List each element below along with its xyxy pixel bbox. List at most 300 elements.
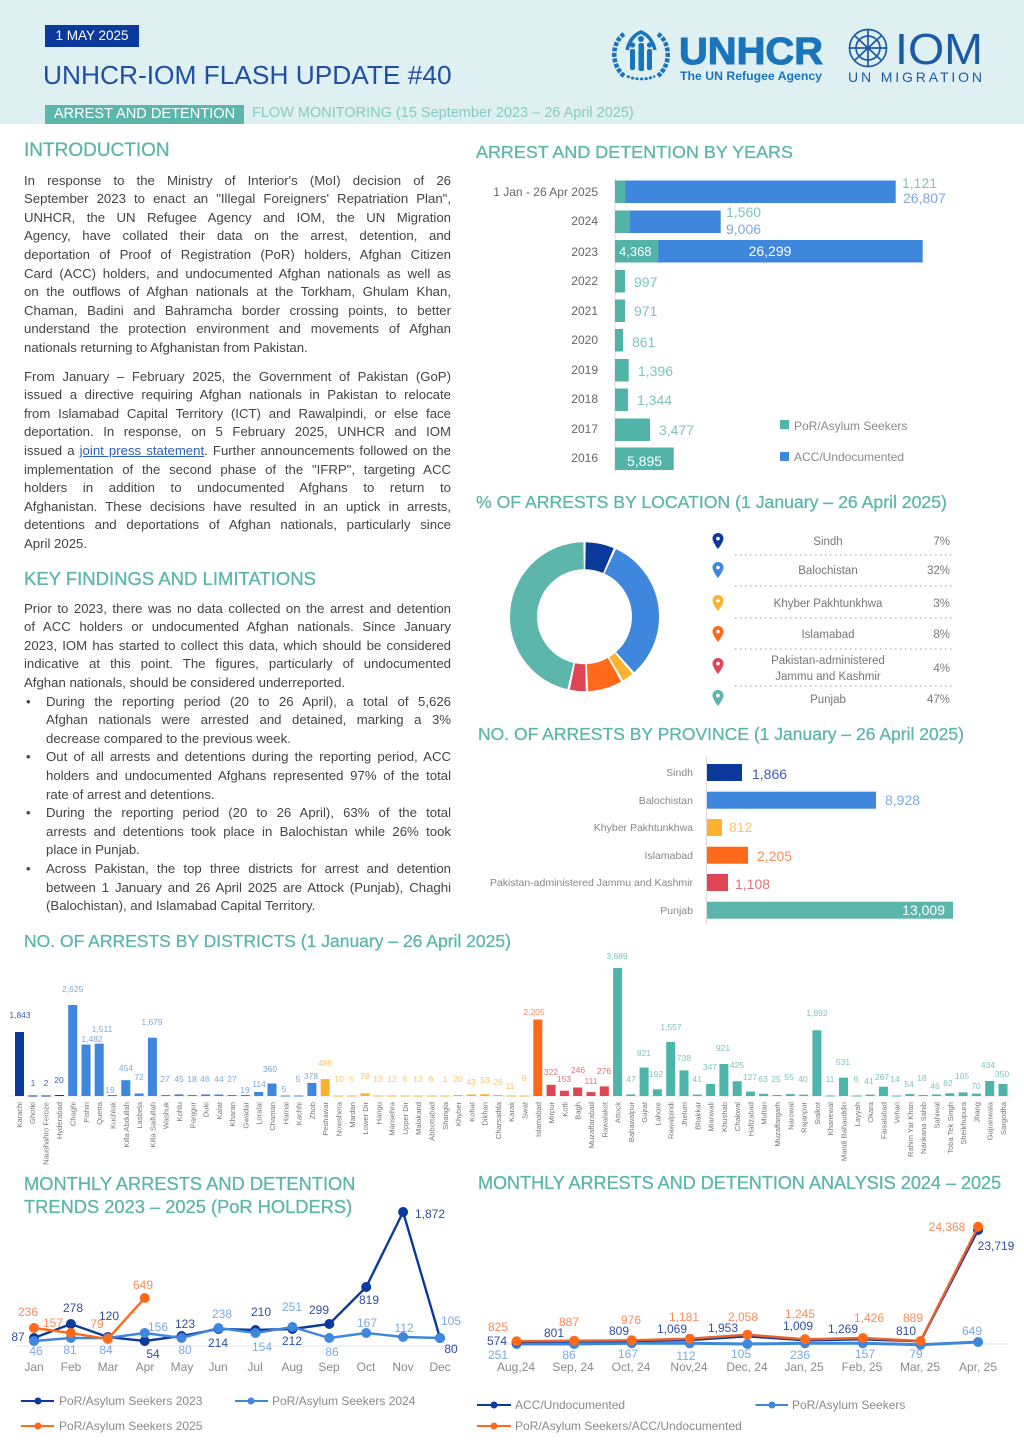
subtitle: FLOW MONITORING (15 September 2023 – 26 April 2025) [252, 105, 634, 121]
text: key findings and limitations: Afghan nationals were arrested and detained, marking a 3% [46, 712, 451, 727]
bar chart: arrests by districts [8, 951, 1012, 1165]
districts: Balochistan: Chaghi [68, 1102, 78, 1126]
bar chart: arrests by years: 2019 [571, 363, 598, 377]
text: key findings and limitations: Out of all arrests and detentions during the reporting period, ACC [46, 749, 451, 764]
bar chart: arrests by years: 997 [634, 274, 658, 290]
series: 2023: 210 [251, 1305, 271, 1319]
text: key findings and limitations: holders and undocumented Afghans represented 97% of the total [46, 768, 451, 783]
series: 2024: 86 [325, 1345, 339, 1359]
text: introduction paragraph 1: Card (ACC) holders, and undocumented Afghan nationals as well as [24, 266, 451, 281]
month axis labels: Jan, 25 [784, 1360, 824, 1374]
bar chart: arrests by province: 1,866 [752, 766, 787, 782]
location names and percentages: Islamabad [801, 629, 855, 641]
text: introduction paragraph 1: Agency, have collated their data on the arrest, detention, and [24, 228, 451, 243]
bar chart: arrests by years: 1,560 [726, 204, 761, 220]
districts: Punjab: Rajanpur [800, 1102, 809, 1133]
districts: Khyber Pakhtunkhwa: 43 [466, 1077, 476, 1087]
districts: Punjab: 47 [626, 1074, 636, 1084]
series: ACC/Undocumented: 810 [896, 1324, 916, 1338]
series: 2023: 123 [175, 1317, 195, 1331]
bar chart: arrests by years: 2023 [571, 245, 598, 259]
text: key findings and limitations: decrease compared to the previous week. [46, 731, 291, 746]
series: PoR/Asylum Seekers/ACC/Undocumented: 976 [621, 1313, 641, 1327]
month axis labels: Dec [429, 1360, 451, 1374]
bar chart: arrests by province: 812 [729, 819, 753, 835]
bar chart: arrests by years: 2016 [571, 451, 598, 465]
series: PoR/Asylum Seekers: 251 [488, 1348, 508, 1362]
districts: Balochistan: Panjgur [188, 1102, 197, 1128]
bar chart: arrests by years: 9,006 [726, 221, 761, 237]
logo: IOM: UN MIGRATION [848, 69, 982, 85]
districts: Khyber Pakhtunkhwa: 26 [493, 1077, 503, 1087]
districts: Khyber Pakhtunkhwa: Karak [507, 1102, 516, 1122]
districts: Punjab: 347 [703, 1062, 717, 1072]
month axis labels: Nov [392, 1360, 414, 1374]
districts: Balochistan: Killa Abdullah [122, 1102, 131, 1148]
districts: Balochistan: Killa Saifullah [148, 1102, 157, 1148]
districts: Punjab: 25 [771, 1074, 781, 1084]
series: ACC/Undocumented [487, 1225, 1015, 1348]
districts: Balochistan: 46 [200, 1074, 210, 1084]
districts: Khyber Pakhtunkhwa: Shangla [441, 1101, 450, 1130]
districts: Khyber Pakhtunkhwa: Kohat [467, 1101, 476, 1122]
month axis labels: Dec, 24 [726, 1360, 768, 1374]
month axis labels: Mar [98, 1360, 118, 1374]
districts: Balochistan: Pishin [82, 1102, 91, 1123]
districts: Punjab: Rawalpindi [667, 1102, 676, 1139]
districts: Punjab: Nankana Sahib [919, 1102, 928, 1154]
location names and percentages: Sindh [813, 536, 843, 548]
text: introduction paragraph 1: nationals returning to Afghanistan from Pakistan. [24, 340, 308, 355]
districts: Punjab: 40 [798, 1074, 808, 1084]
districts: Punjab: Sheikhupura [959, 1101, 968, 1145]
date badge [45, 25, 139, 47]
series: PoR/Asylum Seekers [488, 1324, 983, 1363]
districts: Islamabad: 2,205 [523, 1007, 545, 1017]
legend: trends: PoR/Asylum Seekers 2023 [59, 1394, 203, 1408]
districts: Punjab: Muzaffargarh [773, 1102, 782, 1147]
districts: Punjab: Mianwali [707, 1102, 716, 1132]
districts: Balochistan: Chaman [268, 1102, 277, 1131]
districts: Balochistan: 19 [240, 1085, 250, 1095]
districts: Punjab: Khanewal [826, 1102, 835, 1135]
districts: Punjab: Gujrat [640, 1101, 649, 1123]
logo: IOM [848, 26, 983, 85]
districts: Balochistan: 114 [252, 1079, 266, 1089]
text: introduction paragraph 1: UNHCR, the UN Refugee Agency and IOM, the UN Migration [24, 210, 451, 225]
series: 2023 [11, 1207, 458, 1361]
series: ACC/Undocumented: 1,953 [708, 1321, 738, 1335]
text: key findings and limitations: (Balochistan), and Islamabad Capital Territory. [46, 898, 315, 913]
districts: Sindh [9, 1010, 64, 1165]
series: ACC/Undocumented: 23,719 [978, 1239, 1015, 1253]
districts: Punjab: 41 [692, 1074, 702, 1084]
districts: Balochistan: Loralai [255, 1102, 264, 1125]
districts: Punjab: Mandi Bahauddin [840, 1102, 848, 1161]
series: PoR/Asylum Seekers/ACC/Undocumented: 1,426 [854, 1311, 884, 1325]
bar chart: arrests by years: 861 [632, 334, 656, 350]
donut chart: arrests by location [510, 542, 659, 692]
bar chart: arrests by years: 1,121 [902, 175, 937, 191]
districts: Khyber Pakhtunkhwa: Dikhan [481, 1102, 490, 1126]
bar chart: arrests by years: 3,477 [659, 422, 694, 438]
districts: Khyber Pakhtunkhwa: Malakand [414, 1102, 423, 1135]
title: UNHCR-IOM FLASH UPDATE #40 [43, 60, 452, 90]
districts: Punjab: 738 [677, 1053, 691, 1063]
text: introduction paragraph 1: September 2023 to enact an "Illegal Foreigners' Repatriation Plan", [24, 191, 451, 206]
legend: analysis [477, 1398, 905, 1433]
districts: Balochistan: Kharan [228, 1102, 237, 1126]
series: 2025: 79 [90, 1317, 104, 1331]
text: introduction paragraph 1: In response to the Ministry of Interior's (MoI) decision of 26 [24, 173, 451, 188]
series: 2024: 112 [394, 1321, 414, 1335]
header band [0, 0, 1024, 124]
districts: Khyber Pakhtunkhwa: Upper Dir [401, 1102, 410, 1134]
bar chart: arrests by province: Khyber Pakhtunkhwa [594, 822, 693, 834]
text: introduction paragraph 2: April 2025. [24, 536, 87, 551]
districts: Balochistan: 44 [214, 1074, 224, 1084]
series: PoR/Asylum Seekers/ACC/Undocumented: 889 [903, 1311, 923, 1325]
districts: Sindh: 2 [44, 1078, 49, 1088]
location names and percentages: Pakistan-administered [771, 655, 885, 667]
districts: Punjab: Bhakkar [693, 1102, 702, 1130]
legend: location list with pins [712, 533, 952, 706]
heading: arrests by districts: NO. OF ARRESTS BY DISTRICTS (1 January – 26 April 2025) [24, 931, 511, 951]
series: 2024: 238 [212, 1307, 232, 1321]
districts: Balochistan: 1,511 [92, 1024, 113, 1034]
bar chart: arrests by province: 2,205 [757, 848, 792, 864]
districts: Balochistan: Kohlu [175, 1102, 184, 1121]
bar chart: arrests by province: 13,009 [902, 902, 945, 918]
districts: Punjab: 6 [854, 1074, 859, 1084]
districts: Khyber Pakhtunkhwa: Khyber [454, 1102, 463, 1126]
heading: arrest and detention by years: ARREST AND DETENTION BY YEARS [476, 142, 793, 162]
districts: Khyber Pakhtunkhwa: Charsadda [494, 1101, 503, 1139]
icon: pin Punjab [712, 690, 724, 706]
bar chart: arrests by years: 971 [634, 303, 658, 319]
districts: Sindh: Karachi [15, 1102, 24, 1128]
series: 2024: 251 [282, 1300, 302, 1314]
text: key findings and limitations: Afghan nationals, should be considered underreported. [24, 675, 345, 690]
series: PoR/Asylum Seekers/ACC/Undocumented: 1,245 [785, 1307, 815, 1321]
month axis labels [497, 1360, 997, 1374]
districts: Khyber Pakhtunkhwa: 53 [480, 1075, 490, 1085]
districts: Balochistan: 1,482 [81, 1034, 103, 1044]
logo: UNHCR [612, 30, 824, 83]
month axis labels: Jan [24, 1360, 44, 1374]
bar chart: arrests by province: Punjab [660, 905, 693, 917]
series: 2024: 156 [148, 1320, 168, 1334]
bar chart: arrests by years: 2020 [571, 333, 598, 347]
bar chart: arrests by years: 2018 [571, 392, 598, 406]
month axis labels: Apr [136, 1360, 154, 1374]
text: key findings and limitations: Across Pakistan, the top three districts for arrest and detention [46, 861, 451, 876]
districts: Pakistan-administered Jammu and Kashmir: 246 [571, 1065, 585, 1075]
month axis labels [24, 1360, 451, 1374]
text: key findings and limitations: During the reporting period (20 to 26 April), a total of 5,626 [46, 694, 451, 709]
series: PoR/Asylum Seekers/ACC/Undocumented: 2,058 [728, 1310, 758, 1324]
series: 2024: 167 [357, 1316, 377, 1330]
districts: Khyber Pakhtunkhwa: 20 [453, 1074, 463, 1084]
districts: Balochistan: 27 [160, 1074, 170, 1084]
logo: IOM: IOM [895, 26, 983, 74]
location names and percentages: Punjab [810, 694, 846, 706]
districts: Khyber Pakhtunkhwa: Swat [520, 1101, 530, 1119]
districts: Pakistan-administered Jammu and Kashmir: Kotli [560, 1102, 569, 1117]
text: introduction paragraph 1: understand the protection environment and movements of Afghan [24, 321, 451, 336]
text: introduction paragraph 1: deportation of Proof of Registration (PoR) holders, Afghan Citizen [24, 247, 451, 262]
series: ACC/Undocumented: 1,009 [783, 1319, 813, 1333]
districts: Balochistan [62, 984, 318, 1148]
districts: Sindh: 20 [54, 1075, 64, 1085]
districts: Khyber Pakhtunkhwa: 486 [318, 1058, 332, 1068]
districts: Punjab: 1,557 [660, 1022, 682, 1032]
districts: Khyber Pakhtunkhwa: 9 [522, 1073, 527, 1083]
text: introduction paragraph 2: implementation of the second phase of the "IFRP", targeting ACC [24, 462, 451, 477]
districts: Khyber Pakhtunkhwa: 12 [387, 1074, 397, 1084]
location names and percentages: Khyber Pakhtunkhwa [774, 598, 883, 610]
districts: Balochistan: Kalat [215, 1101, 224, 1119]
districts: Punjab: 3,689 [606, 951, 628, 961]
districts: Punjab: Multan [760, 1102, 769, 1125]
districts: Punjab: Layyah [853, 1102, 862, 1126]
series: PoR/Asylum Seekers: 79 [909, 1347, 923, 1361]
series: 2023: 120 [99, 1309, 119, 1323]
month axis labels: Jul [247, 1360, 263, 1374]
series: 2024: 154 [252, 1340, 272, 1354]
heading: key findings: KEY FINDINGS AND LIMITATIONS [24, 568, 316, 589]
districts: Punjab: 267 [875, 1072, 889, 1082]
bar chart: arrests by years: 2024 [571, 214, 598, 228]
series: ACC/Undocumented: 801 [544, 1326, 564, 1340]
series: 2025: 236 [18, 1305, 38, 1319]
series: PoR/Asylum Seekers: 86 [562, 1348, 576, 1362]
districts: Khyber Pakhtunkhwa: 10 [334, 1074, 344, 1084]
text: introduction paragraph 2: issued a directive requiring Afghan nationals in Pakistan to relocate [24, 387, 451, 402]
districts: Punjab: 18 [917, 1073, 927, 1083]
location names and percentages: 7% [933, 536, 950, 548]
month axis labels: Aug [281, 1360, 303, 1374]
districts: Khyber Pakhtunkhwa: Nowshera [334, 1101, 344, 1136]
districts: Punjab: 192 [649, 1069, 663, 1079]
legend: trends: PoR/Asylum Seekers 2024 [272, 1394, 416, 1408]
districts: Punjab: 531 [836, 1057, 850, 1067]
districts: Khyber Pakhtunkhwa: Mardan [348, 1102, 357, 1128]
districts: Balochistan: 378 [304, 1071, 318, 1081]
text: key findings and limitations: of ACC holders or undocumented Afghan nationals. Since January [24, 619, 451, 634]
text: key findings and limitations: indicative at this point. The figures, particularly of undocumented [24, 656, 451, 671]
series: 2024: 80 [178, 1343, 192, 1357]
districts: Pakistan-administered Jammu and Kashmir: 153 [557, 1074, 571, 1084]
districts: Punjab: Hafizabad [746, 1102, 756, 1136]
series: ACC/Undocumented: 1,269 [828, 1322, 858, 1336]
series: 2023: 278 [63, 1301, 83, 1315]
bar chart: arrests by years: 5,895 [627, 453, 662, 469]
text: introduction paragraph 2: issued a joint press statement. Further announcements followed on the [24, 443, 451, 458]
legend: by years: ACC/Undocumented [794, 450, 904, 464]
districts: Khyber Pakhtunkhwa: 11 [506, 1081, 515, 1091]
districts: Balochistan: 5 [282, 1084, 287, 1094]
series: PoR/Asylum Seekers/ACC/Undocumented: 1,181 [669, 1310, 699, 1324]
districts: Sindh: Naushahro Feroze [42, 1102, 51, 1165]
series: 2024: 46 [29, 1344, 43, 1358]
districts: Punjab: Lahore [653, 1102, 662, 1126]
month axis labels: Jun [208, 1360, 228, 1374]
districts: Balochistan: Washuk [162, 1102, 171, 1129]
series: PoR/Asylum Seekers/ACC/Undocumented: 24,368 [929, 1220, 966, 1234]
text: key findings and limitations: place in Punjab. [46, 842, 140, 857]
districts: Punjab: Narowal [786, 1102, 795, 1130]
districts: Khyber Pakhtunkhwa: Mansehra [388, 1101, 397, 1136]
series: PoR/Asylum Seekers/ACC/Undocumented [488, 1220, 983, 1346]
bar chart: arrests by province: Balochistan [639, 795, 693, 807]
icon: pin Islamabad [712, 626, 724, 642]
districts: Punjab: 105 [955, 1071, 969, 1081]
heading: introduction: INTRODUCTION [24, 140, 170, 161]
month axis labels: Oct, 24 [612, 1360, 651, 1374]
bar chart: arrests by province: Sindh [666, 767, 693, 779]
text: key findings and limitations [24, 601, 451, 913]
location names and percentages: 32% [927, 565, 950, 577]
text: key findings and limitations: During the reporting period (20 to 26 April), 63% of the total [46, 805, 451, 820]
bar chart: arrests by province: 8,928 [885, 792, 920, 808]
districts: Punjab: 127 [743, 1072, 757, 1082]
districts: Punjab: 54 [904, 1079, 914, 1089]
series: PoR/Asylum Seekers: 157 [855, 1347, 875, 1361]
districts: Balochistan: 454 [119, 1063, 133, 1073]
month axis labels: Mar, 25 [900, 1360, 940, 1374]
heading: monthly trends: MONTHLY ARRESTS AND DETENTION [24, 1173, 355, 1194]
bar chart: arrests by years: 1,344 [637, 392, 672, 408]
text: key findings and limitations: arrests and detentions took place in Balochistan while 26% took [46, 824, 451, 839]
series: 2025: 649 [133, 1278, 153, 1292]
districts: Punjab: 921 [716, 1043, 730, 1053]
districts: Balochistan: Quetta [95, 1101, 104, 1125]
line chart: monthly trends PoR holders [11, 1207, 461, 1433]
districts: Punjab: Faisalabad [879, 1102, 888, 1139]
series: PoR/Asylum Seekers: 112 [676, 1349, 696, 1363]
series: 2023: 1,872 [415, 1207, 445, 1221]
text: introduction paragraph 2: Afghanistan. These decisions have resulted in an uptick in arrests, [24, 499, 451, 514]
districts: Punjab: Sialkot [813, 1101, 822, 1125]
districts: Punjab: Rahim Yar Khan [906, 1102, 915, 1157]
districts: Punjab: Gujranwala [986, 1101, 995, 1140]
icon: pin Jammu and Kashmir [712, 658, 724, 674]
month axis labels: Oct [357, 1360, 376, 1374]
location names and percentages: Jammu and Kashmir [775, 671, 881, 683]
month axis labels: Apr, 25 [959, 1360, 997, 1374]
month axis labels: Sep, 24 [552, 1360, 594, 1374]
districts: Punjab: Vehari [893, 1102, 902, 1124]
districts: Pakistan-administered Jammu and Kashmir: Mirpur [547, 1102, 556, 1124]
districts: Punjab: Sahiwal [932, 1102, 942, 1129]
icon: pin Khyber Pakhtunkhwa [712, 595, 724, 611]
month axis labels: May [171, 1360, 193, 1374]
districts: Punjab: 14 [890, 1074, 900, 1084]
districts: Balochistan: 72 [134, 1072, 144, 1082]
districts: Balochistan: Zhob [308, 1102, 317, 1119]
icon: pin Balochistan [712, 562, 724, 578]
districts: Khyber Pakhtunkhwa: Hangu [374, 1102, 383, 1124]
series: PoR/Asylum Seekers: 167 [618, 1347, 638, 1361]
bar chart: arrests by province: Pakistan-administered Jammu and Kashmir [490, 877, 693, 889]
districts: Pakistan-administered Jammu and Kashmir [544, 1065, 611, 1148]
districts: Sindh: 1 [31, 1078, 36, 1088]
districts: Punjab: 55 [784, 1072, 794, 1082]
bar chart: arrests by years: 4,368 [619, 244, 652, 259]
bar chart: arrests by years: 2021 [571, 304, 598, 318]
series: 2024: 84 [99, 1343, 113, 1357]
legend: analysis: PoR/Asylum Seekers [792, 1398, 905, 1412]
districts: Balochistan: Gwadar [241, 1102, 250, 1129]
series: PoR/Asylum Seekers: 649 [962, 1324, 982, 1338]
districts: Pakistan-administered Jammu and Kashmir: 276 [597, 1066, 611, 1076]
location names and percentages: 4% [933, 663, 950, 675]
series: PoR/Asylum Seekers/ACC/Undocumented: 825 [488, 1320, 508, 1334]
series: PoR/Asylum Seekers: 236 [790, 1348, 810, 1362]
text: introduction paragraph 2: from Islamabad Capital Territory (ICT) and Rawalpindi, or else face [24, 406, 451, 421]
districts: Pakistan-administered Jammu and Kashmir: Bagh [574, 1102, 583, 1120]
districts: Punjab: 41 [864, 1076, 874, 1086]
location names and percentages: 47% [927, 694, 950, 706]
bar chart: arrests by years: 26,299 [749, 243, 792, 259]
location names and percentages: 3% [933, 598, 950, 610]
districts: Islamabad: Islamabad [534, 1102, 543, 1137]
location names and percentages [771, 536, 950, 706]
text: key findings and limitations: Prior to 2023, there was no data collected on the arrest and detention [24, 601, 451, 616]
districts: Punjab: 63 [758, 1074, 768, 1084]
bar chart: arrests by years: 2017 [571, 422, 598, 436]
date badge: 1 MAY 2025 [55, 28, 129, 43]
districts: Punjab: 434 [981, 1060, 995, 1070]
districts: Punjab: 350 [995, 1069, 1009, 1079]
series: PoR/Asylum Seekers/ACC/Undocumented: 887 [559, 1315, 579, 1329]
districts: Punjab: 1,892 [806, 1008, 828, 1018]
series: 2024: 81 [63, 1343, 77, 1357]
districts: Balochistan: Duki [202, 1102, 211, 1117]
heading: percent of arrests by location: % OF ARRESTS BY LOCATION (1 January – 26 April 2025) [476, 492, 947, 512]
districts: Punjab: 70 [971, 1081, 981, 1091]
districts: Khyber Pakhtunkhwa: 13 [373, 1074, 383, 1084]
series: 2024 [29, 1300, 461, 1359]
districts: Balochistan: Kuchlak [108, 1102, 118, 1129]
districts: Punjab: 425 [730, 1060, 744, 1070]
districts: Pakistan-administered Jammu and Kashmir: 322 [544, 1067, 558, 1077]
districts: Balochistan: Lasbela [135, 1101, 144, 1129]
text: introduction paragraph 2: From January – February 2025, the Government of Pakistan (GoP) [24, 369, 451, 384]
bar chart: arrests by years: 1,396 [638, 363, 673, 379]
districts: Khyber Pakhtunkhwa: 13 [413, 1074, 423, 1084]
series: 2023: 80 [444, 1342, 458, 1356]
districts: Islamabad [523, 1007, 545, 1137]
location names and percentages: 8% [933, 629, 950, 641]
text: key findings and limitations: rate of arrest and detentions. [46, 787, 215, 802]
districts: Pakistan-administered Jammu and Kashmir: 111 [585, 1076, 598, 1086]
bar chart: arrests by years: 1 Jan - 26 Apr 2025 [493, 185, 598, 199]
legend: trends [21, 1394, 416, 1433]
bar chart: arrests by province [490, 757, 953, 925]
heading: monthly trends [24, 1173, 355, 1218]
text: key findings and limitations: between 1 January and 26 April 2025 are Attock (Punjab), Chaghi [46, 880, 451, 895]
text: introduction paragraph 2: deportation. In response, on 5 February 2025, UNHCR and IOM [24, 424, 451, 439]
heading: arrests by province: NO. OF ARRESTS BY PROVINCE (1 January – 26 April 2025) [478, 724, 964, 744]
text: introduction paragraph 1: on the outflows of Afghan nationals at the Torkham, Ghulam Khan, [24, 284, 451, 299]
districts: Khyber Pakhtunkhwa: Peshawar [321, 1102, 330, 1136]
section tag: ARREST AND DETENTION [54, 106, 235, 122]
districts: Sindh: 1,843 [9, 1010, 31, 1020]
districts: Balochistan: 1,679 [141, 1017, 163, 1027]
text: introduction paragraph 1: Chaman, Badini and Bahramcha border crossing points, to better [24, 303, 451, 318]
